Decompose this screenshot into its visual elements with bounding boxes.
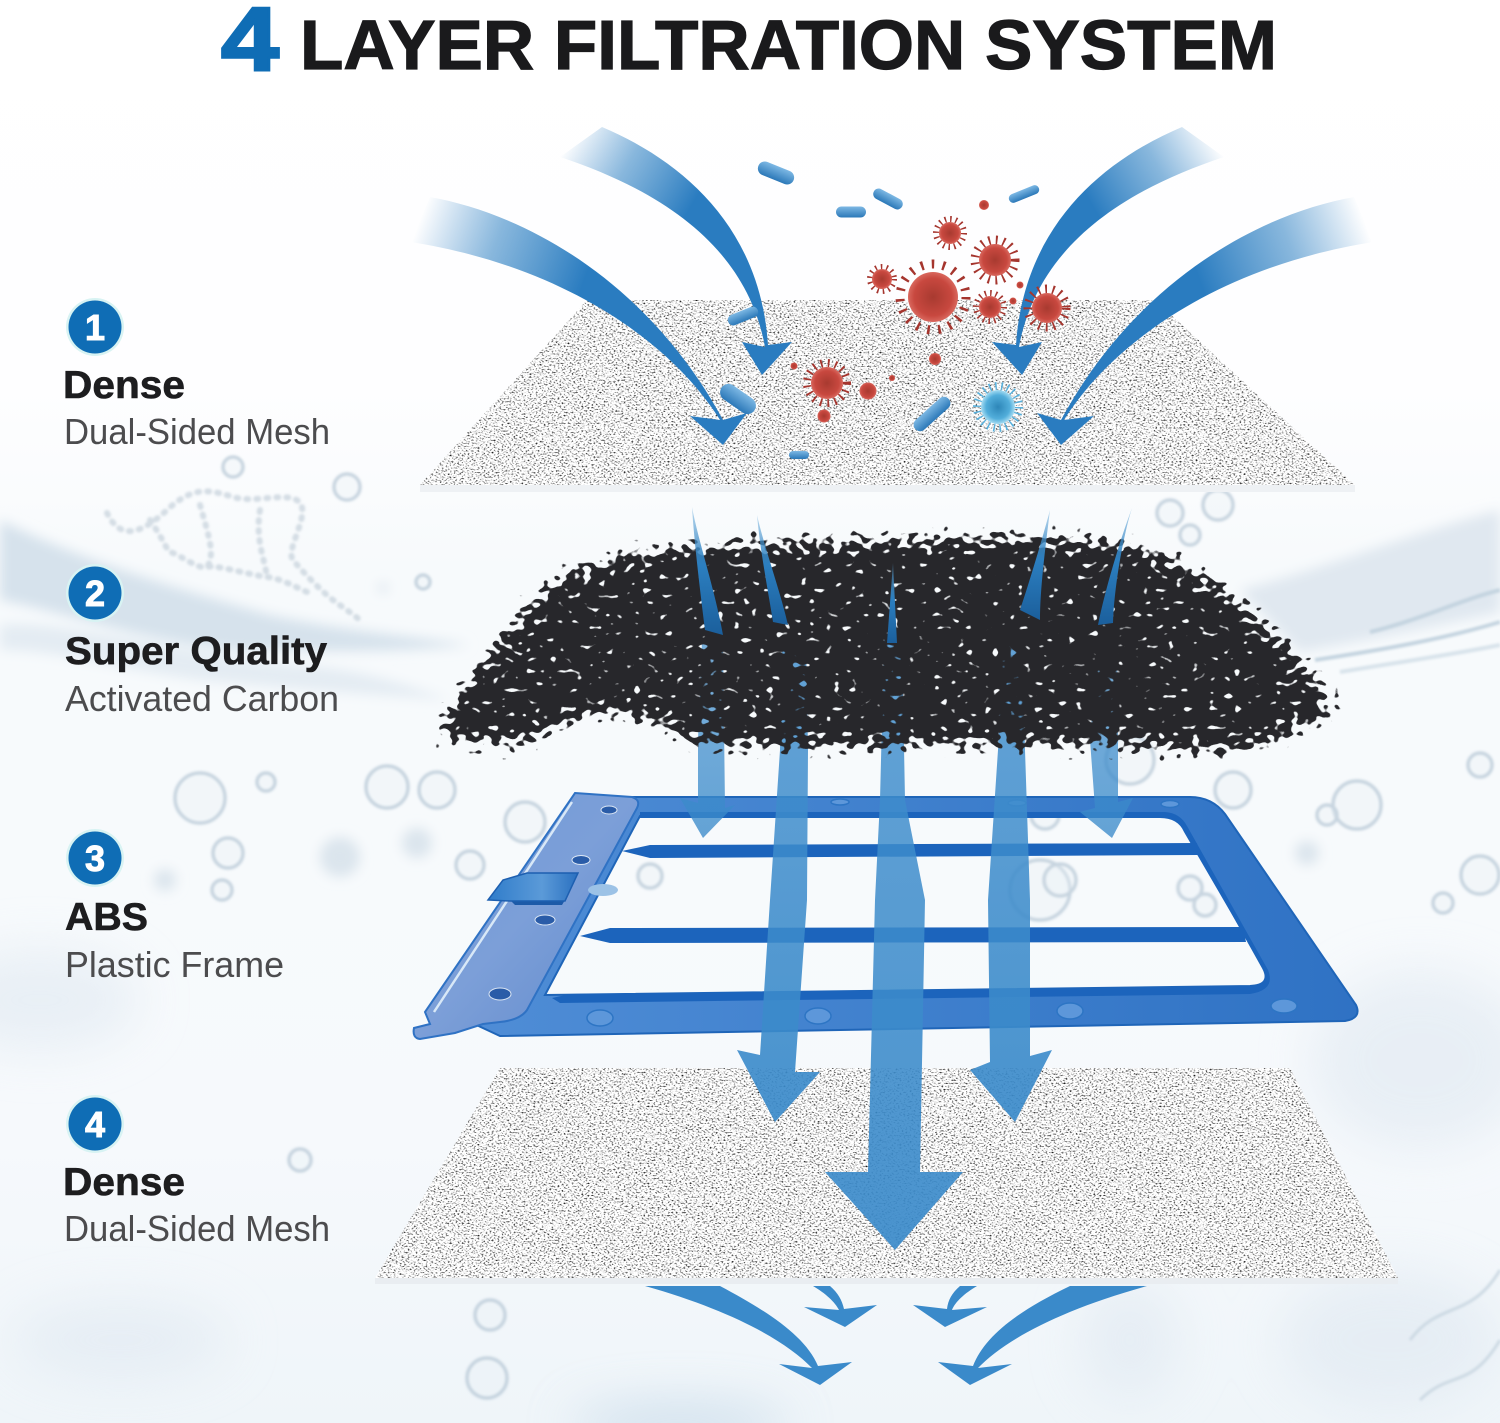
outgoing arrow 1 bbox=[645, 1286, 852, 1385]
step 2 label: Activated Carbon bbox=[65, 678, 339, 719]
step 4 label: Dense bbox=[63, 1161, 185, 1204]
title bbox=[221, 0, 1277, 90]
arrow: far right bbox=[1037, 197, 1374, 445]
frame rivets bbox=[587, 799, 1297, 1026]
arrow: inner left bbox=[560, 127, 792, 375]
outgoing arrows bbox=[645, 1286, 1147, 1385]
step 2 label: 2 bbox=[85, 573, 105, 614]
layer 4: dense mesh bbox=[375, 1068, 1398, 1284]
step 1 label: Dense bbox=[63, 364, 185, 407]
arrow: inner right bbox=[992, 127, 1224, 375]
frame clip bbox=[488, 873, 578, 905]
step 1 label: Dual-Sided Mesh bbox=[64, 411, 330, 452]
frame body bbox=[470, 797, 1358, 1036]
step 2 label: Super Quality bbox=[65, 630, 327, 673]
arrow 4 bbox=[970, 640, 1052, 1122]
step 3 label bbox=[65, 829, 284, 985]
step 4 label: Dual-Sided Mesh bbox=[64, 1208, 330, 1249]
layer 2: activated carbon bbox=[425, 532, 1345, 758]
left plate bbox=[414, 793, 638, 1039]
layer 1: dense mesh bbox=[420, 300, 1355, 492]
arrow: far left bbox=[410, 197, 747, 445]
layer 3: blue plastic frame bbox=[414, 793, 1358, 1039]
background water and bubbles bbox=[0, 457, 1500, 1423]
incoming arrows bbox=[410, 127, 1374, 445]
plate rivets bbox=[489, 806, 617, 1000]
arrow 1 bbox=[680, 640, 735, 838]
downward arrow shafts bbox=[680, 640, 1133, 1250]
outgoing arrow 4 bbox=[938, 1286, 1147, 1385]
step 3 label: ABS bbox=[65, 896, 148, 939]
arrow 5 bbox=[1080, 640, 1133, 838]
plate rim highlight bbox=[434, 802, 572, 1012]
step 3 label: Plastic Frame bbox=[65, 944, 284, 985]
step 4 label bbox=[63, 1095, 330, 1249]
step 4 label: 4 bbox=[85, 1104, 105, 1145]
step 1 label bbox=[63, 298, 330, 452]
viruses bbox=[790, 200, 1066, 428]
arrow spikes over carbon bbox=[692, 507, 1132, 643]
arrow 3 bbox=[825, 640, 963, 1250]
outgoing arrow 3 bbox=[913, 1286, 987, 1327]
arrow 2 bbox=[737, 640, 820, 1122]
step 1 label: 1 bbox=[85, 307, 105, 348]
frame bars bbox=[552, 812, 1270, 1003]
frame tab bbox=[588, 884, 618, 896]
title text: LAYER FILTRATION SYSTEM bbox=[300, 6, 1277, 84]
step 3 label: 3 bbox=[85, 838, 105, 879]
step 2 label bbox=[65, 564, 339, 719]
outgoing arrow 2 bbox=[804, 1286, 877, 1327]
bacteria bbox=[717, 159, 1041, 459]
